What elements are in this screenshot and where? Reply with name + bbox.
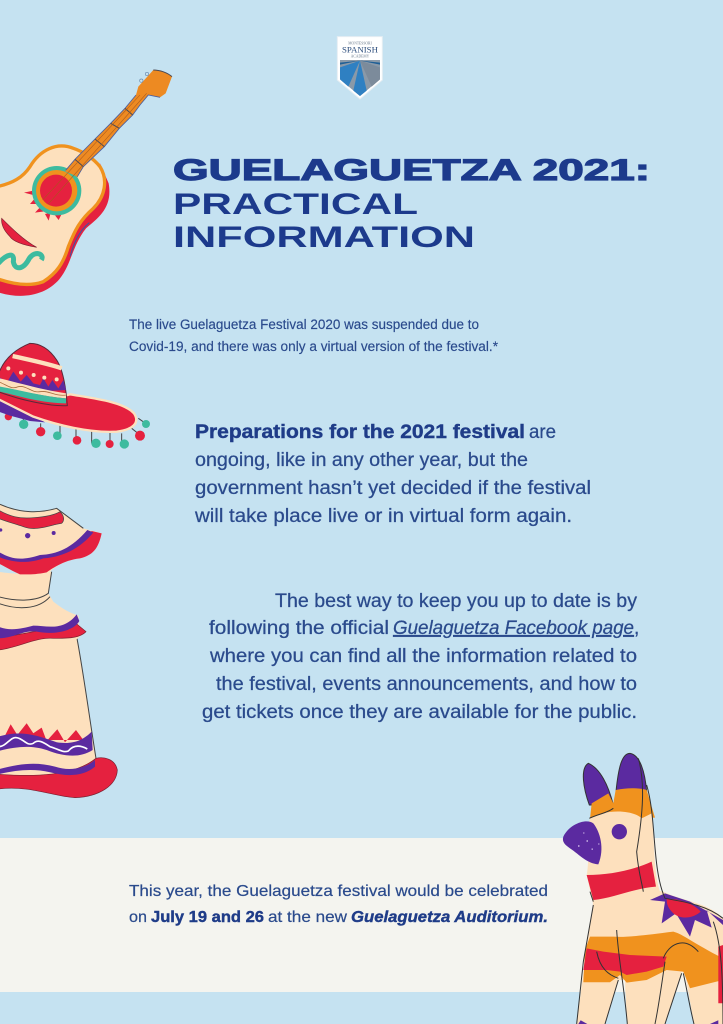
guitar sunburst xyxy=(24,191,62,221)
footer text: festival dates: on xyxy=(129,909,147,926)
paragraph: preparations xyxy=(194,422,591,527)
pinata outlines xyxy=(577,758,723,1024)
footer band xyxy=(0,838,723,992)
paragraph: preparations: will take place live or in virtual form again. xyxy=(194,506,572,527)
sombrero brim xyxy=(0,388,136,432)
paragraph: preparations: government hasn’t yet decided if the festival xyxy=(195,478,591,499)
pinata orange stripe xyxy=(583,932,723,988)
icon: dress xyxy=(0,503,117,798)
title line 2: PRACTICAL xyxy=(173,188,418,221)
guitar neck xyxy=(43,70,172,204)
pinata leg gaps xyxy=(605,972,694,1024)
title line 3: INFORMATION xyxy=(173,221,475,254)
paragraph: stay up to date: The best way to keep you up to date is by xyxy=(275,591,638,612)
guitar sound hole rosette xyxy=(32,166,81,215)
dress top red collar xyxy=(0,510,64,528)
logo: Spanish academy shield: ACADEMY xyxy=(351,54,370,58)
intro text: The live Guelaguetza Festival 2020 was suspended due to xyxy=(129,317,479,332)
paragraph: preparations: Preparations for the 2021 festival xyxy=(195,422,525,443)
icon: pinata xyxy=(563,753,723,1024)
logo: Spanish academy shield: SPANISH xyxy=(342,45,378,54)
paragraph: stay up to date: following the official xyxy=(209,618,389,639)
pinata hooves xyxy=(578,1020,718,1024)
icon: sombrero xyxy=(0,343,150,449)
pinata red stripe xyxy=(583,945,723,1003)
pinata body xyxy=(577,891,723,1024)
dress waist xyxy=(0,572,86,650)
intro text: Covid-19, and there was only a virtual version of the festival.* xyxy=(129,339,499,354)
paragraph: stay up to date: where you can find all the information related to xyxy=(209,646,637,667)
dress skirt red hem xyxy=(0,758,117,798)
guitar red back xyxy=(0,163,109,296)
sombrero crown bands xyxy=(0,356,66,403)
dress skirt xyxy=(0,637,96,782)
pinata eye xyxy=(612,824,627,839)
title line 1: GUELAGUETZA 2021: xyxy=(173,154,650,187)
pinata back sunburst xyxy=(650,893,723,937)
logo: Spanish academy shield: MONTESSORI xyxy=(348,42,372,46)
footer text: festival dates: This year, the Guelaguetza festival would be celebrated xyxy=(129,883,548,900)
paragraph: stay up to date xyxy=(202,591,639,723)
dress top frills xyxy=(0,528,102,574)
footer text: festival dates: Guelaguetza Auditorium. xyxy=(351,909,548,926)
paragraph: stay up to date: the festival, events announcements, and how to xyxy=(216,674,637,695)
guitar body xyxy=(0,146,105,284)
icon: guitar xyxy=(0,70,172,296)
dress skirt purple bands xyxy=(0,723,95,775)
footer text: festival dates: at the new xyxy=(268,909,347,926)
paragraph: stay up to date: get tickets once they are available for the public. xyxy=(202,702,637,723)
sombrero purple underside xyxy=(0,395,45,422)
dress waist frills xyxy=(0,614,86,650)
footer text: festival dates: July 19 and 26 xyxy=(151,909,264,926)
guitar teal swirl xyxy=(0,254,42,268)
title xyxy=(173,154,650,254)
intro text xyxy=(129,317,499,354)
pinata snout xyxy=(563,821,601,864)
guitar red mark xyxy=(2,218,37,247)
sombrero pompoms xyxy=(5,412,150,449)
logo: Spanish academy shield xyxy=(337,37,382,99)
paragraph: stay up to date: Guelaguetza Facebook page xyxy=(393,618,634,639)
pinata ears xyxy=(583,753,655,819)
dress top xyxy=(0,503,102,574)
footer text: festival dates xyxy=(129,883,548,926)
pinata collar xyxy=(587,862,656,900)
paragraph: stay up to date: , xyxy=(634,618,639,639)
sombrero crown xyxy=(0,343,67,406)
paragraph: preparations: ongoing, like in any other year, but the xyxy=(195,450,528,471)
pinata head xyxy=(587,811,660,905)
paragraph: preparations: are xyxy=(529,422,556,443)
